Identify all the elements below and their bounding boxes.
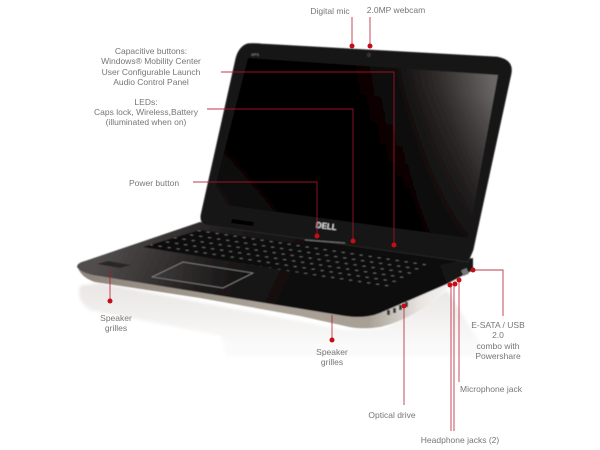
touchpad (152, 262, 253, 288)
usb port (461, 268, 469, 276)
label: microphone jack: Microphone jack (460, 384, 523, 394)
label: e-SATA: combo with (476, 341, 520, 351)
label: webcam: 2.0MP webcam (367, 5, 425, 15)
label: speaker grilles right (316, 347, 348, 367)
label: LEDs (94, 97, 199, 127)
side ports (387, 302, 408, 315)
right side panel (440, 258, 473, 284)
webcam (367, 53, 371, 57)
label: speaker grilles left: Speaker (100, 313, 132, 323)
label: capacitive buttons (101, 46, 201, 87)
keyboard (143, 230, 432, 288)
label: headphone jacks: Headphone jacks (2) (421, 435, 499, 445)
label: e-SATA (471, 320, 525, 361)
silver base band (78, 268, 468, 328)
hinge (231, 219, 254, 226)
label: LEDs: LEDs: (134, 97, 158, 107)
callout dots (108, 44, 476, 342)
label: digital mic: Digital mic (310, 6, 350, 16)
label: power button: Power button (129, 178, 179, 188)
speaker grille left (97, 261, 131, 268)
label: capacitive buttons: User Configurable Launch (102, 67, 201, 77)
reflection under laptop (79, 283, 490, 356)
label: speaker grilles left (100, 313, 132, 333)
XPS logo: XPS (251, 52, 259, 57)
label: speaker grilles right: Speaker (316, 347, 348, 357)
label: e-SATA: E-SATA / USB (471, 320, 525, 330)
laptop (77, 44, 511, 328)
label: capacitive buttons: Windows® Mobility Center (101, 56, 201, 66)
Dell logo: DELL (315, 221, 337, 232)
label: optical drive: Optical drive (368, 410, 416, 420)
label: speaker grilles left: grilles (105, 323, 127, 333)
callout lines (110, 17, 503, 431)
label: capacitive buttons: Capacitive buttons: (115, 46, 187, 56)
lid (201, 44, 511, 262)
keyboard deck (77, 222, 473, 317)
power strip (305, 240, 345, 243)
label: capacitive buttons: Audio Control Panel (113, 77, 189, 87)
label: LEDs: Caps lock, Wireless,Battery (94, 107, 199, 117)
label: speaker grilles right: grilles (321, 357, 343, 367)
label: LEDs: (illuminated when on) (106, 117, 187, 127)
screen (211, 58, 498, 238)
label: e-SATA: Powershare (475, 351, 521, 361)
label: e-SATA: 2.0 (492, 330, 504, 340)
